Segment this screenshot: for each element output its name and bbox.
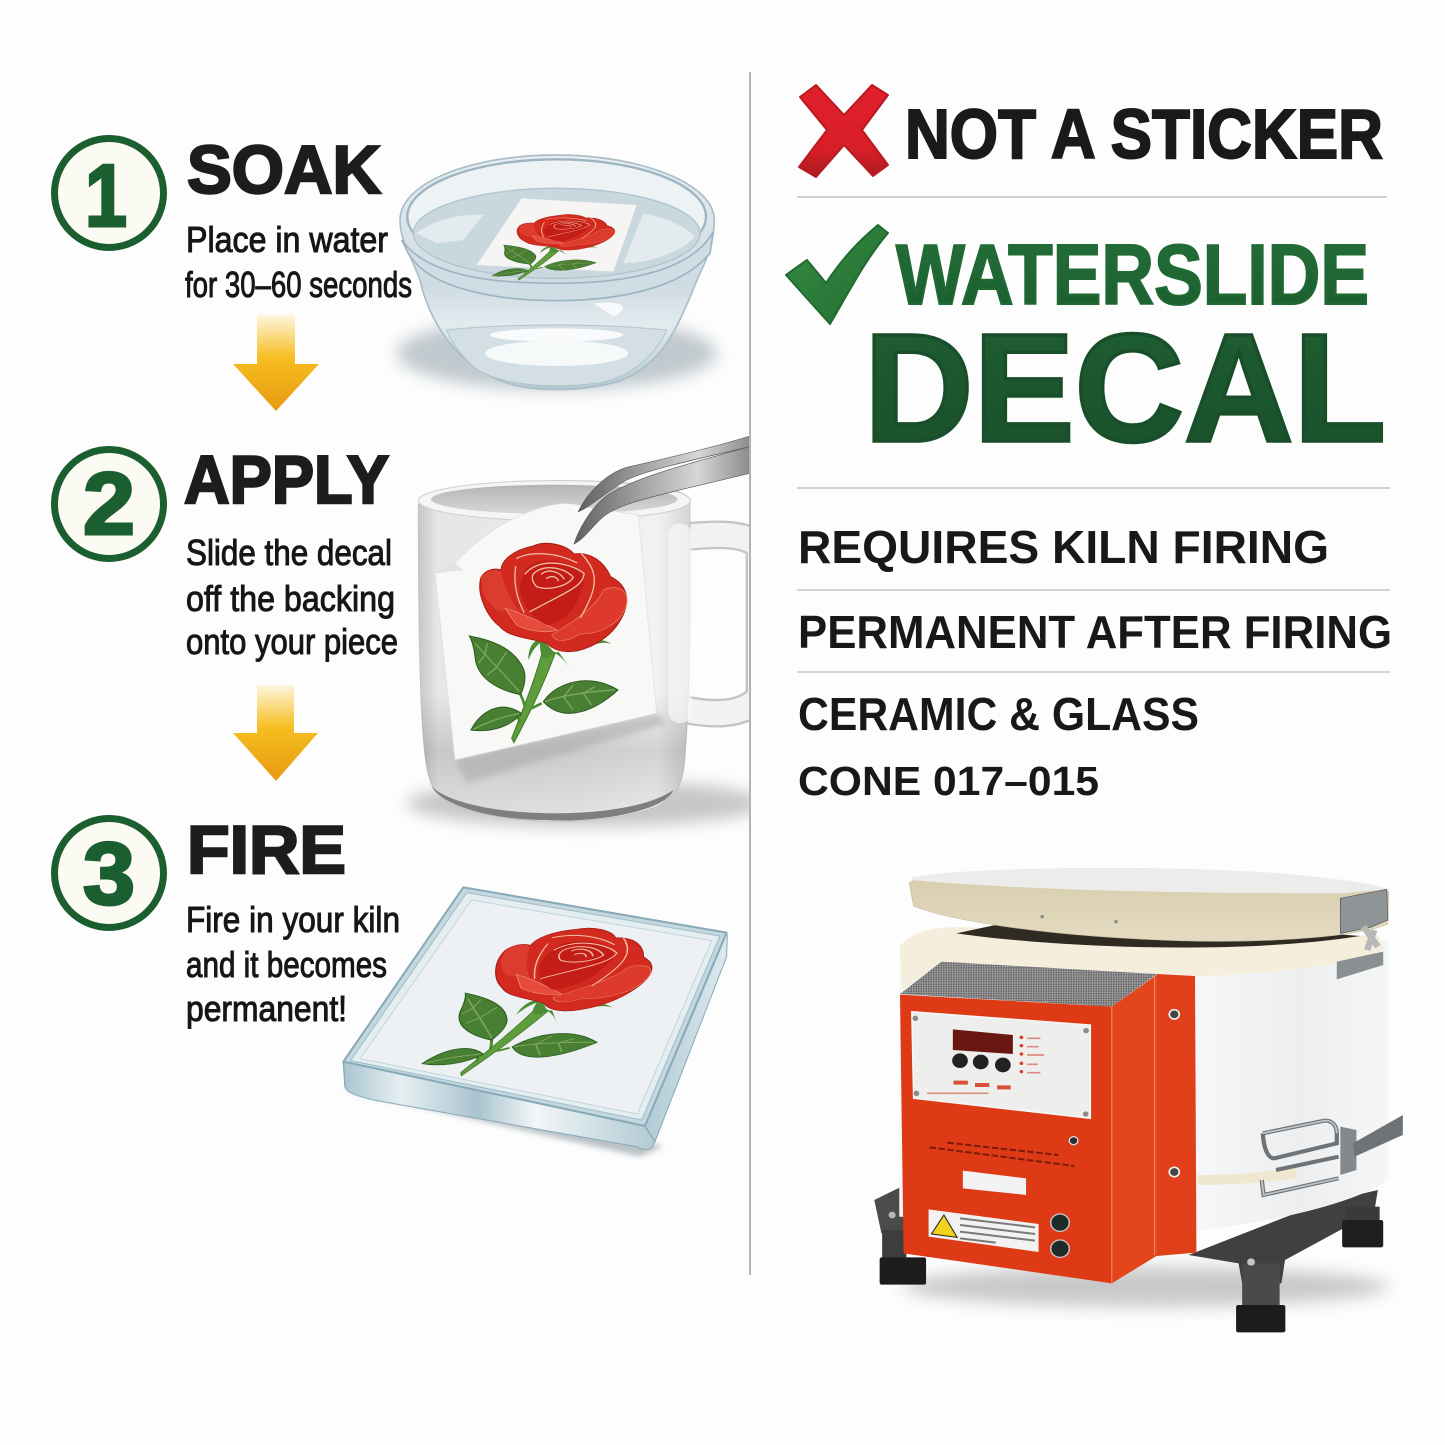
fact: kiln firing: REQUIRES KILN FIRING bbox=[798, 521, 1329, 573]
step 2 description: onto your piece bbox=[186, 621, 398, 662]
step 3 badge: 3 bbox=[83, 824, 135, 923]
fact: permanent: PERMANENT AFTER FIRING bbox=[798, 606, 1392, 658]
heading: not a sticker: NOT A STICKER bbox=[905, 95, 1383, 173]
icon: red X bbox=[799, 85, 888, 177]
step 3 description: and it becomes bbox=[186, 944, 387, 985]
step 3 description: Fire in your kiln bbox=[186, 899, 400, 940]
icon: water bowl with decal bbox=[397, 155, 717, 390]
control box bbox=[900, 962, 1157, 1007]
cream ring bbox=[900, 927, 1384, 990]
step 1 description: Place in water bbox=[186, 219, 388, 260]
step 1 description bbox=[185, 219, 412, 305]
step 3 description: permanent! bbox=[186, 988, 347, 1029]
vertical divider bbox=[749, 72, 751, 1275]
arrow: step 1 to 2 bbox=[233, 315, 319, 411]
step 3 description bbox=[186, 899, 400, 1029]
lid bbox=[909, 868, 1389, 941]
step 2 badge: 2 bbox=[83, 454, 135, 553]
latch bbox=[1262, 1121, 1339, 1195]
arrow: step 2 to 3 bbox=[233, 685, 318, 781]
icon: mug with decal and tweezers bbox=[407, 436, 767, 827]
step 3 heading: FIRE bbox=[187, 812, 346, 888]
step 1 description: for 30–60 seconds bbox=[185, 264, 412, 305]
panel: steps bbox=[54, 132, 767, 1157]
step 2 badge bbox=[54, 450, 164, 558]
step 1 badge bbox=[54, 138, 164, 248]
heading: waterslide: WATERSLIDE bbox=[896, 228, 1369, 323]
step 3 badge bbox=[54, 818, 164, 928]
illustration: kiln bbox=[874, 868, 1403, 1332]
rear legs bbox=[874, 1186, 906, 1233]
step 1 heading: SOAK bbox=[187, 132, 381, 208]
step 2 description: Slide the decal bbox=[186, 532, 392, 573]
step 2 heading: APPLY bbox=[184, 442, 389, 518]
icon: glass tile with fired decal bbox=[343, 887, 727, 1157]
fact: materials: CERAMIC & GLASS bbox=[798, 688, 1199, 740]
body bbox=[899, 940, 1389, 1231]
heading: decal: DECAL bbox=[864, 302, 1386, 474]
printed lines bbox=[930, 1143, 1074, 1166]
step 2 description bbox=[186, 532, 398, 662]
control panel bbox=[912, 1012, 1090, 1118]
step 2 description: off the backing bbox=[186, 578, 395, 619]
icon: green check bbox=[786, 225, 888, 324]
panel: product facts bbox=[786, 85, 1403, 1332]
step 1 badge: 1 bbox=[85, 146, 127, 245]
hinge hardware bbox=[1340, 889, 1388, 933]
fact: cone range: CONE 017–015 bbox=[798, 758, 1099, 804]
labels bbox=[963, 1171, 1026, 1195]
